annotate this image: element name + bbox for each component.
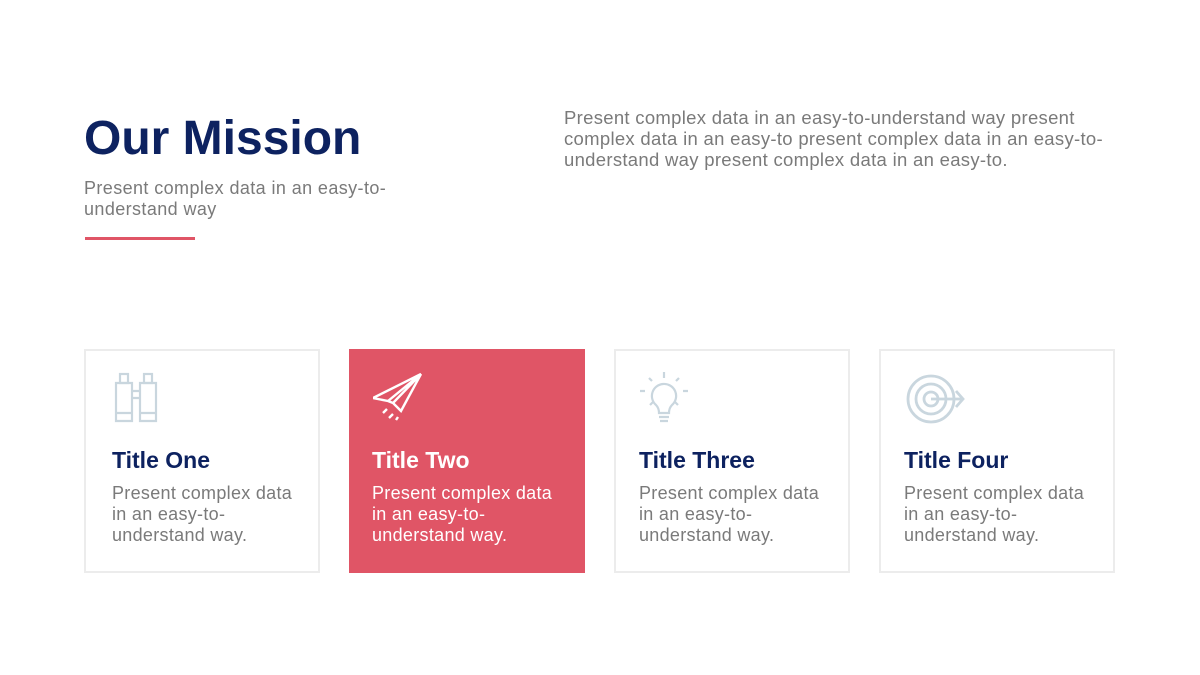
intro paragraph: understand way present complex data in an easy-to. (564, 149, 1008, 170)
icon: target (906, 374, 965, 424)
card: title two (349, 349, 585, 573)
intro paragraph: Present complex data in an easy-to-understand way present (564, 107, 1075, 128)
subtitle: understand way (84, 199, 217, 219)
body text: understand way. (112, 525, 247, 545)
subtitle (84, 178, 386, 219)
body text: in an easy-to- (112, 504, 225, 524)
heading: Title Three (639, 447, 755, 473)
body text: in an easy-to- (639, 504, 752, 524)
body text: understand way. (372, 525, 507, 545)
heading: Title Two (372, 447, 470, 473)
body text: understand way. (904, 525, 1039, 545)
body text (904, 483, 1084, 545)
card: title four (879, 349, 1115, 573)
body text: in an easy-to- (904, 504, 1017, 524)
icon: light bulb (640, 372, 688, 422)
body text: Present complex data (639, 483, 819, 503)
body text: in an easy-to- (372, 504, 485, 524)
intro paragraph (564, 107, 1103, 170)
icon: binoculars (114, 372, 158, 422)
body text (112, 483, 292, 545)
body text (372, 483, 552, 545)
heading: Title One (112, 447, 210, 473)
accent line (85, 237, 195, 240)
body text: Present complex data (112, 483, 292, 503)
body text: Present complex data (372, 483, 552, 503)
body text (639, 483, 819, 545)
intro paragraph: complex data in an easy-to present complex data in an easy-to- (564, 128, 1103, 149)
icon: paper plane (373, 372, 422, 421)
body text: understand way. (639, 525, 774, 545)
subtitle: Present complex data in an easy-to- (84, 178, 386, 198)
title: Our Mission (84, 112, 361, 165)
body text: Present complex data (904, 483, 1084, 503)
card: title one (84, 349, 320, 573)
card: title three (614, 349, 850, 573)
heading: Title Four (904, 447, 1008, 473)
